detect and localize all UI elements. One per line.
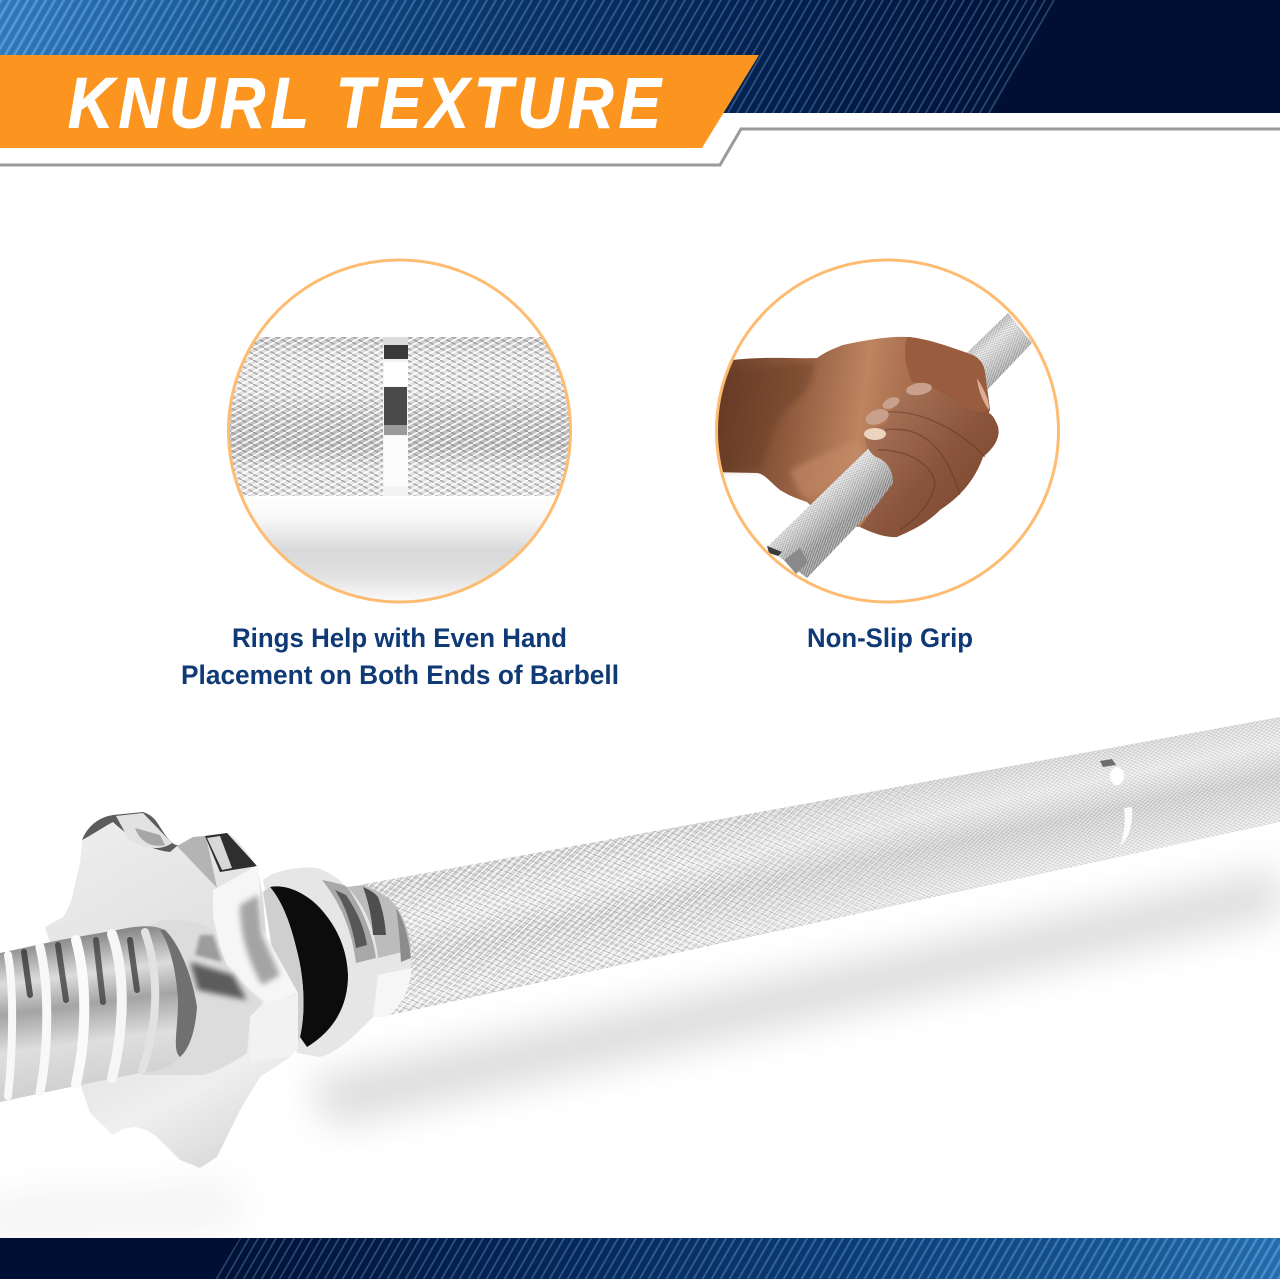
header blue striped gradient [0, 0, 1057, 113]
nut top edge [82, 812, 178, 852]
inner silver ring [263, 887, 304, 1045]
knurled shaft [360, 717, 1280, 1015]
caption line 1: Rings Help with Even Hand [232, 623, 567, 653]
barbell photo [0, 717, 1280, 1240]
footer band [0, 1238, 1280, 1279]
nut right lobe [213, 865, 298, 1003]
thumbnail [977, 378, 989, 410]
floor shadow [0, 870, 1280, 1240]
caption line 2: Placement on Both Ends of Barbell [181, 660, 619, 690]
footer navy background [0, 1238, 1280, 1279]
orange title ribbon [0, 55, 759, 148]
header banner [0, 0, 1280, 165]
header navy background [0, 0, 1280, 113]
grip bar [767, 313, 1032, 578]
fingers [860, 382, 999, 537]
hand and bar photo [710, 313, 1032, 578]
wrist shading [712, 362, 815, 472]
close-up photo of knurled bar [225, 337, 575, 606]
star lock nut [45, 812, 298, 1168]
threaded rod [0, 926, 197, 1102]
caption: non-slip grip: Non-Slip Grip [807, 623, 973, 653]
nut hub [140, 920, 263, 1075]
knuckle creases [878, 412, 985, 530]
hand-placement ring [1100, 759, 1132, 846]
palm crease [790, 450, 846, 500]
title: KNURL TEXTURE [68, 64, 666, 144]
thumb [905, 337, 990, 412]
grey outline under title [0, 129, 1280, 165]
nut hub lower right [250, 995, 298, 1062]
palm and back of hand [710, 337, 990, 527]
orange circle outline [716, 260, 1058, 602]
collar chrome bands [347, 885, 411, 958]
nut upper lobe bevel [177, 836, 217, 888]
collar [263, 868, 412, 1057]
fingernails [863, 381, 933, 440]
black rubber ring [270, 886, 348, 1047]
footer blue striped gradient [215, 1238, 1280, 1279]
panel: knurl rings close-up [225, 260, 575, 606]
caption: rings [181, 623, 619, 690]
panel: hand gripping bar [710, 260, 1058, 602]
orange circle outline [228, 260, 570, 602]
